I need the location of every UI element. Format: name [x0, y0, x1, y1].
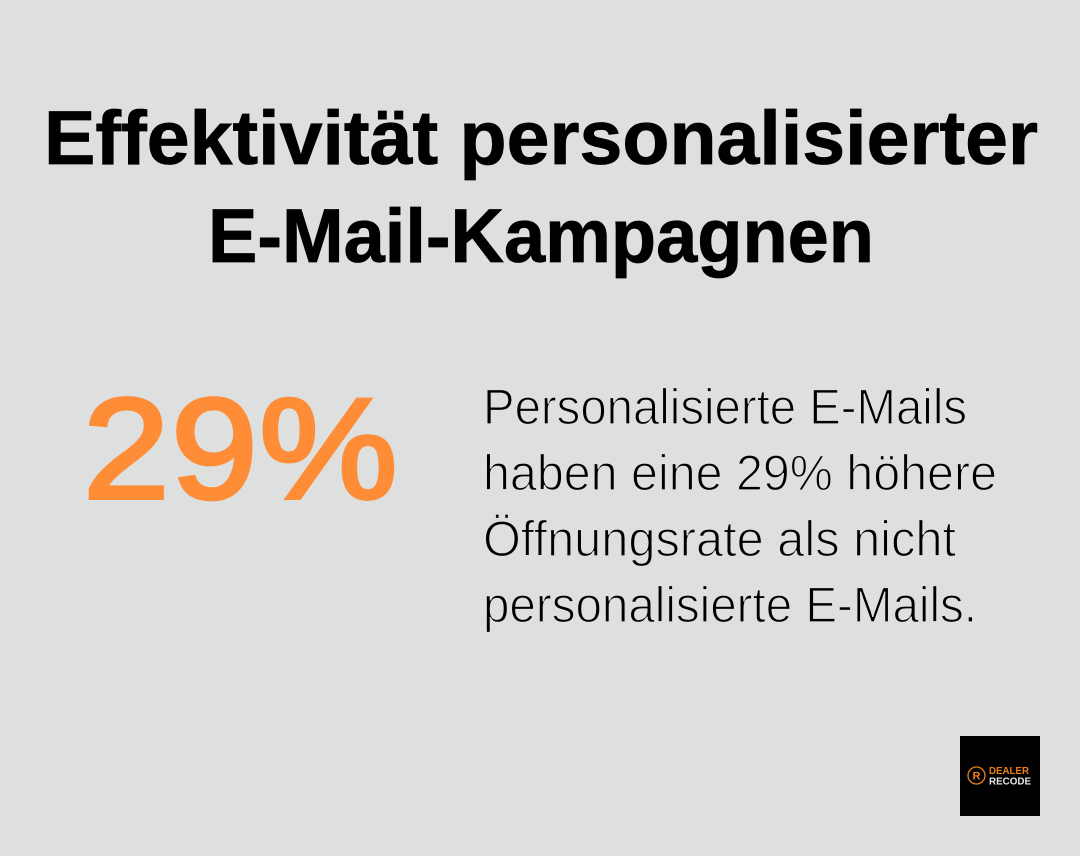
- description text: Personalisierte E-Mails: [483, 379, 967, 435]
- description text: personalisierte E-Mails.: [483, 577, 977, 633]
- title: Effektivität personalisierter: [44, 96, 1038, 181]
- logo wordmark: DEALER: [989, 766, 1030, 777]
- logo wordmark: [989, 766, 1031, 788]
- logo wordmark: RECODE: [989, 776, 1031, 788]
- big stat: 29%: 29%: [83, 369, 398, 529]
- description text: Öffnungsrate als nicht: [483, 511, 956, 567]
- description text: [483, 379, 997, 633]
- title: [44, 96, 1038, 279]
- icon: logo ring with R: R: [973, 770, 981, 782]
- description text: haben eine 29% höhere: [483, 445, 997, 501]
- logo: Dealer Recode: [960, 736, 1040, 816]
- title: E-Mail-Kampagnen: [208, 194, 874, 279]
